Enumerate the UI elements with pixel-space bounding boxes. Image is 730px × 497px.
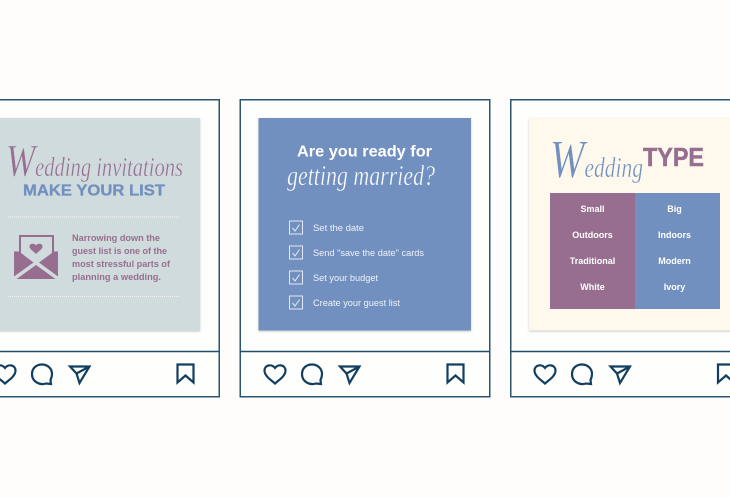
- checklist text: Send "save the date" cards: [313, 248, 424, 259]
- body text: planning a wedding.: [72, 272, 161, 282]
- action icons: [0, 364, 194, 384]
- panel: getting married checklist post: [240, 100, 490, 397]
- checklist: [290, 221, 424, 309]
- right column: Modern: [658, 256, 691, 266]
- script heading: getting married?: [287, 160, 435, 192]
- card background: [258, 118, 471, 330]
- checklist text: [313, 223, 424, 309]
- body text: guest list is one of the: [72, 246, 167, 256]
- right column: Big: [667, 204, 682, 214]
- body text: Narrowing down the: [72, 233, 160, 243]
- heading: are you ready for: Are you ready for: [297, 144, 432, 160]
- left column: Traditional: [570, 256, 615, 266]
- heading: make your list: MAKE YOUR LIST: [23, 182, 165, 200]
- right column: Ivory: [664, 282, 685, 292]
- card background: [529, 118, 730, 330]
- checklist text: Set your budget: [313, 273, 378, 284]
- heading: type: TYPE: [643, 142, 704, 172]
- action icons: [534, 364, 730, 384]
- body text: [72, 233, 171, 282]
- left column: White: [580, 282, 605, 292]
- post frame: [0, 100, 219, 397]
- script heading: Wedding: [550, 129, 643, 189]
- icon: envelope with heart: [14, 235, 58, 279]
- checkbox: [290, 221, 302, 309]
- panel: wedding type post: [510, 100, 730, 397]
- body text: most stressful parts of: [72, 259, 171, 269]
- checklist text: Set the date: [313, 223, 364, 234]
- panel: wedding invitations post: [0, 100, 219, 397]
- script heading: Wedding invitations: [6, 135, 183, 186]
- card background: [0, 118, 200, 330]
- comparison table: [550, 193, 720, 309]
- left column: Small: [580, 204, 605, 214]
- post frame: [240, 100, 490, 397]
- right column: [635, 193, 720, 309]
- action icons: [264, 364, 464, 384]
- left column: Outdoors: [572, 230, 613, 240]
- left column: [550, 193, 635, 309]
- post frame: [511, 100, 730, 397]
- checklist text: Create your guest list: [313, 298, 400, 309]
- right column: Indoors: [658, 230, 691, 240]
